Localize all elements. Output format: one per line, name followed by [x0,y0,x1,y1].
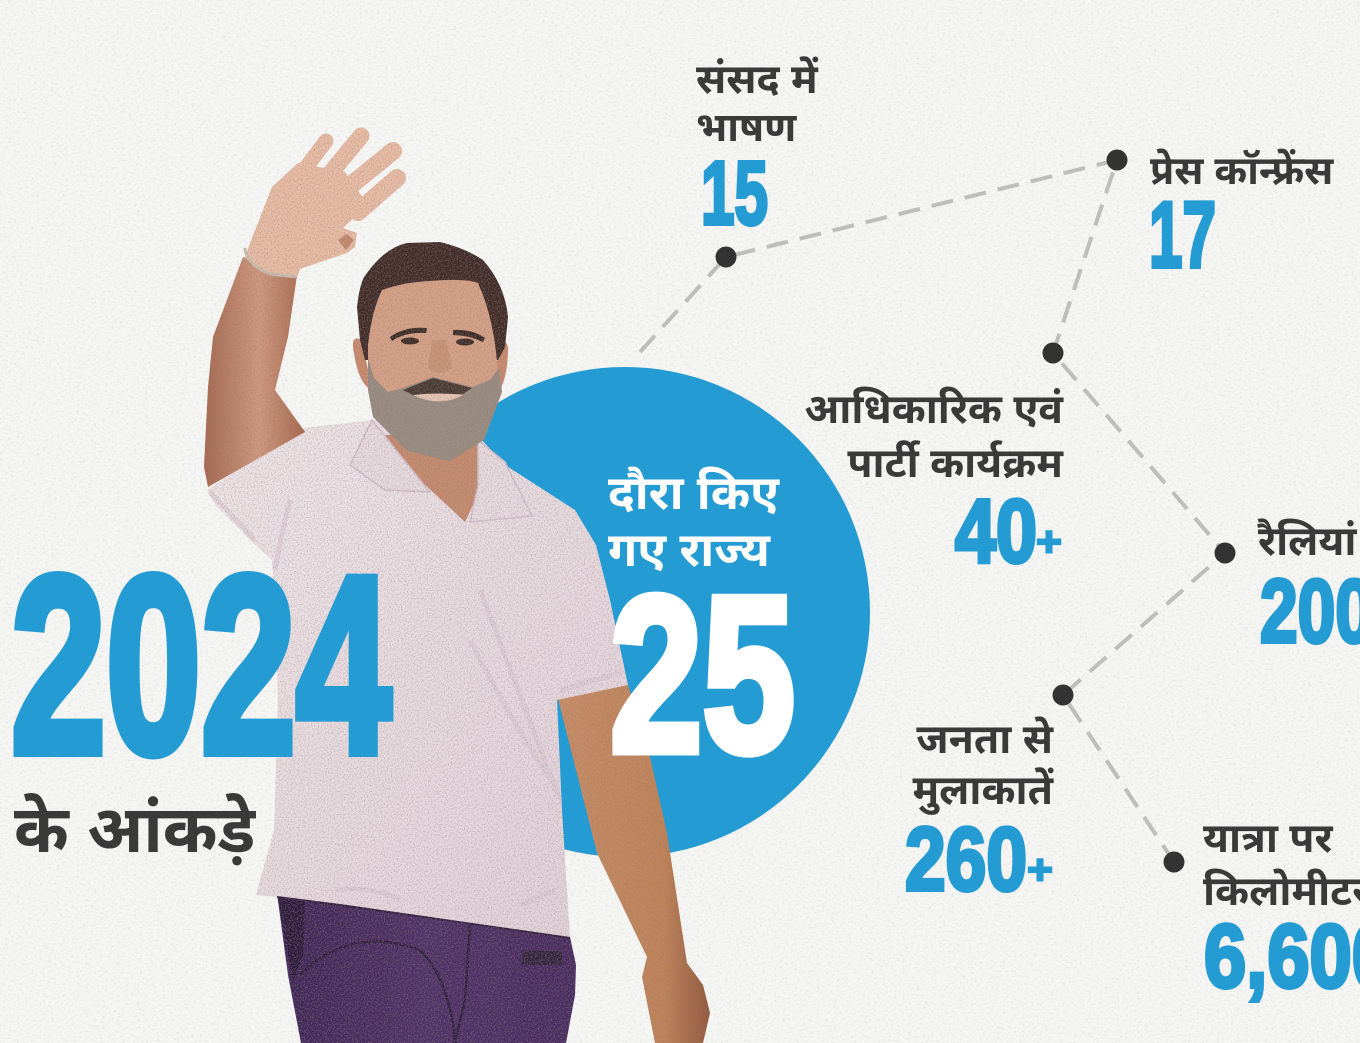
stat: parliament speeches 15: 15 [701,144,768,244]
circle label: states visited [608,466,795,799]
nose shading [428,340,452,373]
stat: public meetings 260+: + [1027,846,1053,893]
stat: official and party events 40+ [804,386,1064,582]
hair [357,242,508,360]
year 2024: 2024 [11,525,391,806]
person waving [204,136,710,1043]
stat: public meetings 260+ [905,715,1055,910]
stat: parliament speeches 15: संसद में [696,56,819,102]
right arm lowered [557,685,710,1043]
stat: yatra kilometres 6,600: यात्रा पर [1203,815,1334,861]
stat: parliament speeches 15 [696,56,819,244]
moustache [403,378,472,395]
dashed connector line [640,160,1225,862]
shirt hem shadow [277,897,570,938]
stat: official and party events 40+: + [1036,518,1062,565]
stat: press conferences 17 [1149,148,1334,287]
shirt folds [210,492,622,905]
eyes and brows [390,328,485,346]
stat: public meetings 260+: 260 [905,810,1027,910]
trousers [277,893,576,1043]
raised hand [245,136,397,277]
shirt collar [350,420,532,522]
stat: yatra kilometres 6,600 [1203,815,1360,1007]
face [368,280,500,458]
stat: rallies 200: रैलियां [1257,517,1357,564]
stat: press conferences 17: 17 [1149,182,1216,287]
mouth [413,394,463,402]
stat: official and party events 40+: आधिकारिक एवं [804,386,1064,432]
node dots [716,150,1236,872]
polo shirt [207,420,628,938]
stat: press conferences 17: प्रेस कॉन्फ्रेंस [1150,148,1334,193]
subheading: के आंकड़े: के आंकड़े [14,792,257,866]
bracelet [245,248,296,277]
trouser details [277,893,562,1043]
stat: public meetings 260+: जनता से [916,715,1054,762]
stat: parliament speeches 15: भाषण [696,106,797,150]
stat: rallies 200 [1257,517,1360,662]
stat: public meetings 260+: मुलाकातें [912,767,1055,815]
circle label: states visited: दौरा किए [608,466,780,520]
circle label: states visited: गए राज्य [608,524,771,577]
raised arm [204,257,305,487]
ears [353,339,508,390]
beard [368,358,502,461]
number 25: 25 [610,551,795,799]
blue circle [380,367,870,857]
stat: official and party events 40+: 40 [955,482,1037,582]
stat: official and party events 40+: पार्टी कार्यक्रम [847,440,1064,486]
neck [385,435,482,522]
